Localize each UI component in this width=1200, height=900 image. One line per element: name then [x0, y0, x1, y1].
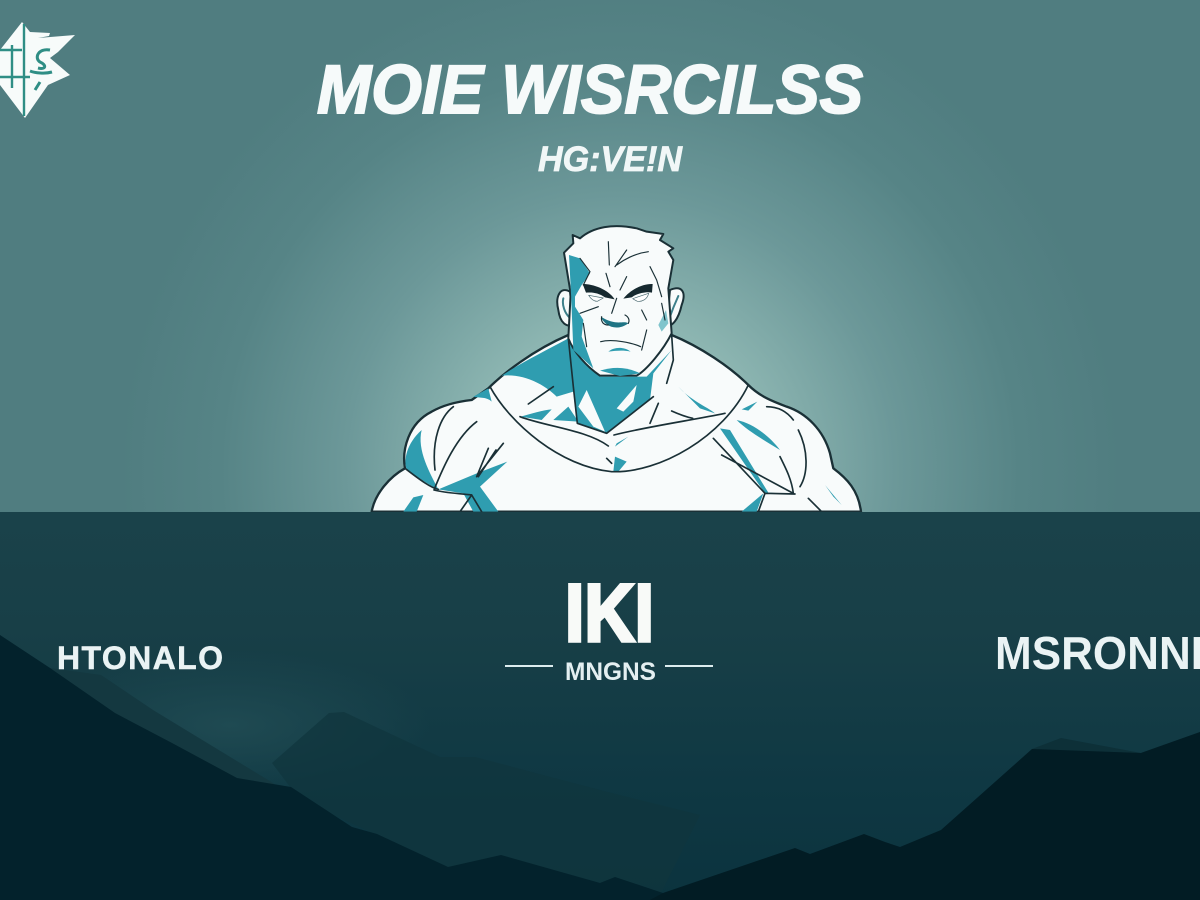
- subtitle: HG:VE!N: [538, 140, 683, 179]
- logo emblem: [0, 22, 75, 118]
- left label: HTONALO: [57, 640, 223, 676]
- body silhouette: [372, 335, 861, 512]
- lower dark panel: [0, 512, 1200, 900]
- center big text: IKI: [565, 568, 654, 659]
- far ridge right: [1032, 732, 1200, 800]
- hair lines and brow: [580, 242, 665, 350]
- far ridge left: [0, 640, 300, 900]
- center divider right: [665, 665, 713, 667]
- front mountain left: [0, 635, 663, 900]
- center stat: [505, 568, 713, 686]
- body lines: [405, 335, 822, 512]
- eyes and brows: [583, 284, 653, 299]
- front mountain right: [650, 732, 1200, 900]
- center divider left: [505, 665, 553, 667]
- white neck highlights: [578, 385, 637, 432]
- center small text: MNGNS: [565, 658, 656, 686]
- lighter valley haze: [30, 650, 430, 800]
- head: [564, 226, 673, 376]
- face shading: [569, 255, 668, 376]
- middle mountain: [272, 712, 700, 895]
- ears: [557, 288, 684, 326]
- mountain range backdrop: [0, 635, 1200, 900]
- body shading: [403, 338, 842, 512]
- upper background with radial glow: [0, 0, 1200, 513]
- title: MOIE WISRCILSS: [317, 51, 863, 128]
- illustration: muscular man: [372, 226, 861, 512]
